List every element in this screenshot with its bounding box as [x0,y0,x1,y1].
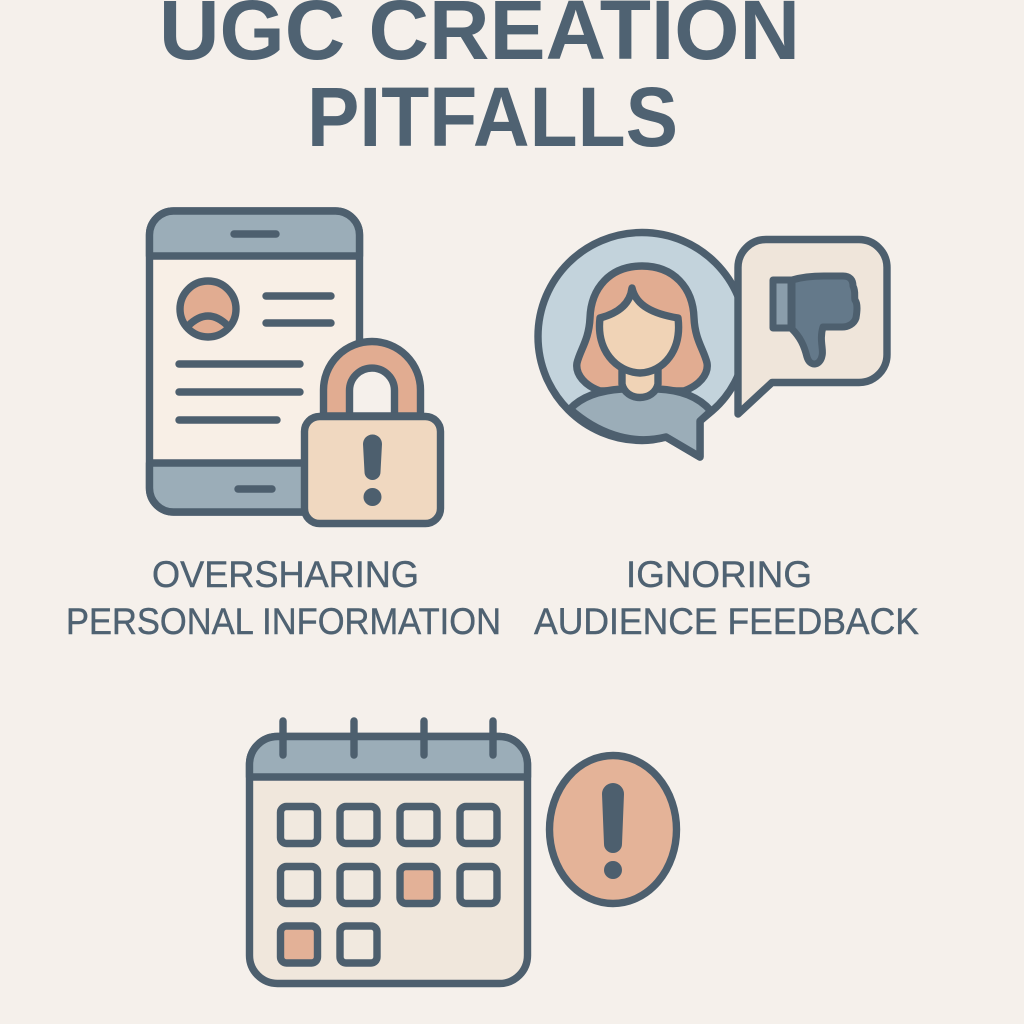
icon: thumbs down [773,276,857,364]
label: oversharing personal information [66,554,501,642]
neck [622,360,658,398]
icon: calendar [250,721,528,984]
title: PITFALLS [307,70,678,164]
icon: exclamation alert [550,756,676,904]
label: oversharing personal information: OVERSHARING [152,554,419,595]
padlock [304,342,440,524]
title [159,0,800,164]
calendar rings [283,721,493,755]
label: oversharing personal information: PERSONAL INFORMATION [66,601,501,642]
calendar header [250,736,528,777]
label: ignoring audience feedback: AUDIENCE FEEDBACK [534,601,919,642]
label: ignoring audience feedback [534,554,919,642]
icon: person with thumbs-down speech bubble [538,232,887,457]
calendar day cells [280,806,497,963]
icon: phone with padlock [150,211,440,524]
profile avatar [180,281,236,337]
feedback speech bubble [738,240,887,414]
label: ignoring audience feedback: IGNORING [626,554,812,595]
shoulders [570,389,711,457]
profile text lines [179,296,331,420]
person speech bubble [538,232,746,457]
phone body [150,211,360,512]
face [599,288,679,373]
hair [577,266,707,391]
